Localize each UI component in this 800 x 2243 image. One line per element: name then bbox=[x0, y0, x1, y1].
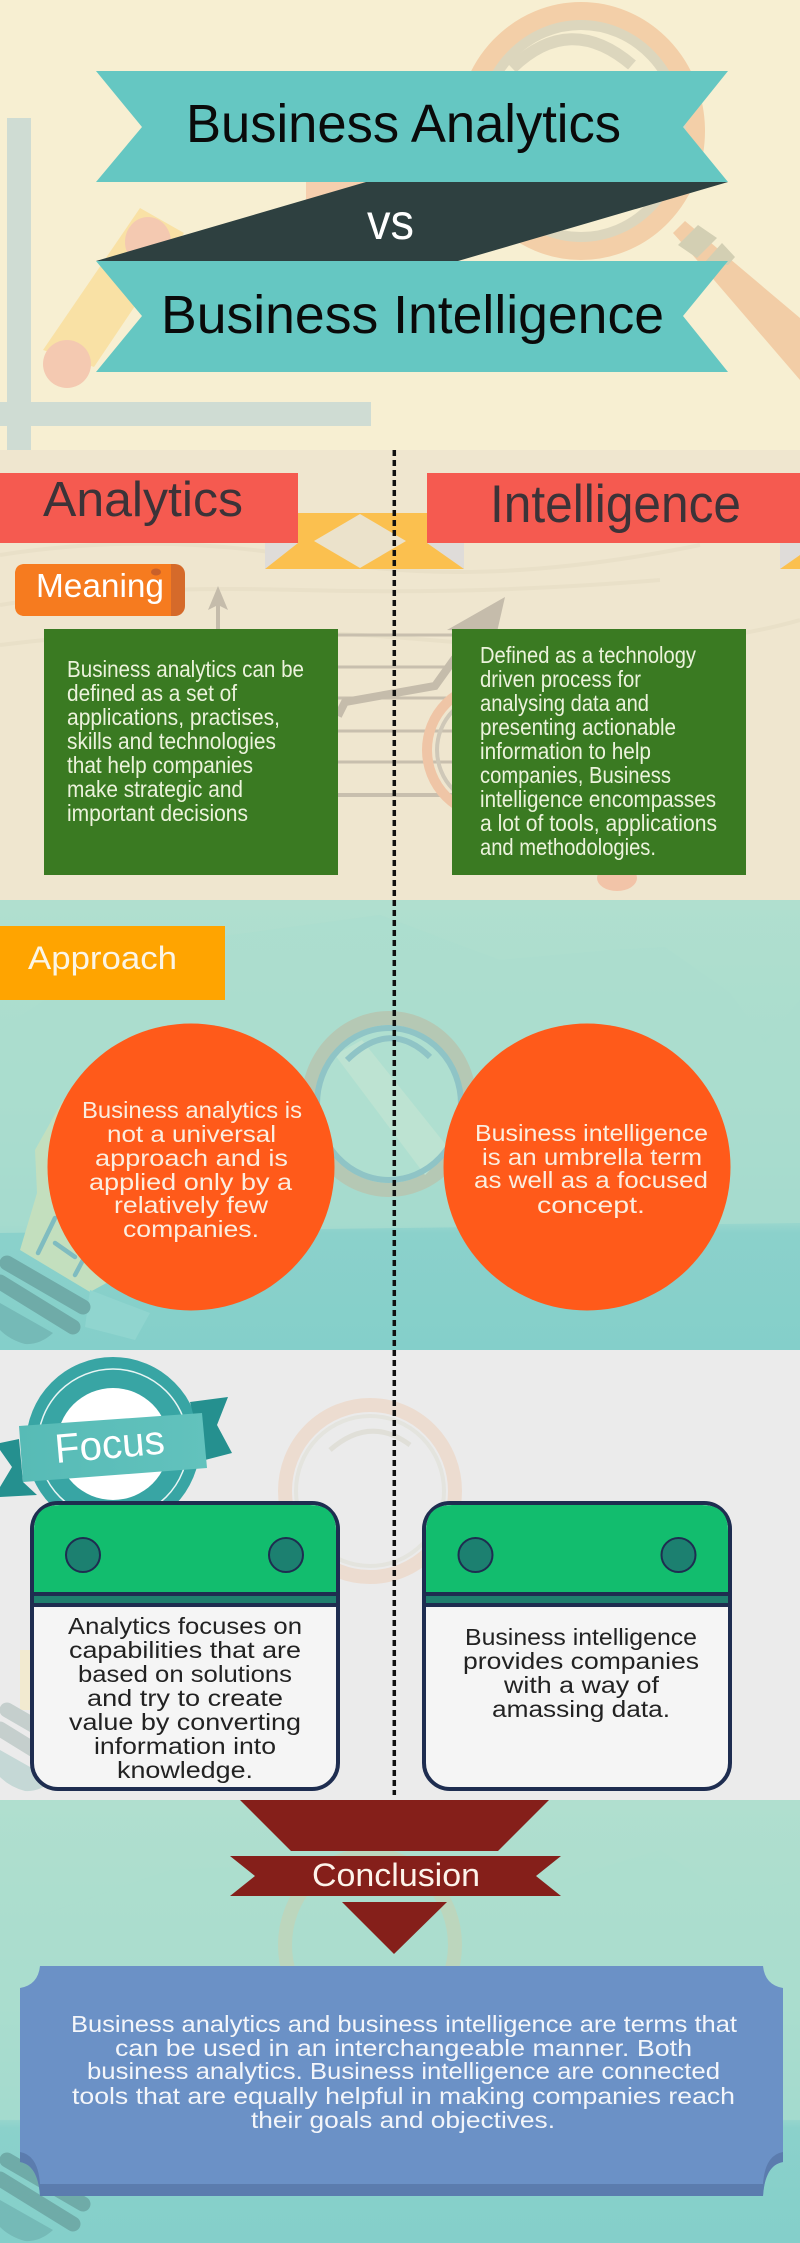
circle: analytics approach: approach and is bbox=[95, 1145, 288, 1171]
banner: Business Intelligence: Business Intelligence bbox=[161, 285, 664, 345]
badge: Focus: Focus bbox=[53, 1417, 166, 1472]
panel: focus bbox=[0, 1350, 800, 1800]
card: analytics focus bbox=[32, 1503, 338, 1789]
text box: analytics meaning: defined as a set of bbox=[67, 680, 237, 706]
text box: intelligence meaning: driven process for bbox=[480, 666, 641, 692]
background: magnifier bbox=[285, 1855, 455, 2035]
plaque: conclusion text: business analytics. Business intelligence are connected bbox=[87, 2058, 720, 2084]
text box: analytics meaning: make strategic and bbox=[67, 776, 243, 802]
text box: analytics meaning: important decisions bbox=[67, 800, 248, 826]
text box: analytics meaning: skills and technologies bbox=[67, 728, 276, 754]
tag: Approach: Approach bbox=[28, 940, 177, 976]
heading: Analytics bbox=[0, 473, 298, 543]
panel: approach bbox=[0, 900, 800, 1350]
badge: Focus bbox=[0, 1357, 232, 1531]
background: light bulb bbox=[0, 1100, 150, 1344]
circle: analytics approach: applied only by a bbox=[89, 1169, 293, 1195]
circle: analytics approach bbox=[48, 1024, 334, 1310]
background: pencil bbox=[43, 182, 366, 388]
card: intelligence focus: with a way of bbox=[503, 1672, 660, 1698]
text box: intelligence meaning: intelligence encompasses bbox=[480, 786, 716, 812]
plaque: conclusion text bbox=[20, 1966, 783, 2196]
banner: vs: vs bbox=[367, 194, 414, 250]
tag: Approach bbox=[0, 926, 225, 1000]
plaque: conclusion text: Business analytics and business intelligence are terms that bbox=[71, 2011, 738, 2037]
heading: Analytics: Analytics bbox=[43, 473, 243, 527]
banner: Business Analytics bbox=[96, 71, 728, 182]
shape: bottom triangle bbox=[342, 1902, 447, 1954]
text box: analytics meaning: Business analytics can be bbox=[67, 656, 304, 682]
card: analytics focus: Analytics focuses on bbox=[68, 1613, 302, 1639]
circle: intelligence approach: is an umbrella term bbox=[482, 1144, 702, 1170]
card: analytics focus: knowledge. bbox=[117, 1757, 253, 1783]
tag: Meaning: Meaning bbox=[36, 567, 164, 604]
text box: intelligence meaning: Defined as a technology bbox=[480, 642, 696, 668]
panel: header bbox=[0, 0, 800, 450]
background: light bulb bars bbox=[0, 2160, 83, 2241]
background: mountains bbox=[0, 1850, 800, 2120]
card: analytics focus: based on solutions bbox=[78, 1661, 292, 1687]
panel: conclusion bbox=[0, 1800, 800, 2243]
card: analytics focus: and try to create bbox=[87, 1685, 283, 1711]
shape: top trapezoid bbox=[240, 1800, 549, 1851]
tag: Meaning bbox=[15, 564, 185, 616]
circle: intelligence approach: Business intelligence bbox=[475, 1120, 708, 1146]
divider: dotted centre line bbox=[393, 450, 396, 1795]
heading: Intelligence: Intelligence bbox=[490, 475, 741, 534]
text box: intelligence meaning: companies, Business bbox=[480, 762, 671, 788]
background: magnifier bbox=[308, 1018, 470, 1190]
decoration: yellow triangles bbox=[265, 513, 800, 569]
background: light bulb bars bbox=[0, 1650, 83, 1791]
text box: analytics meaning bbox=[44, 629, 338, 875]
background: magnifier bbox=[467, 12, 800, 380]
text box: intelligence meaning bbox=[452, 629, 746, 875]
card: analytics focus: capabilities that are bbox=[69, 1637, 301, 1663]
text box: analytics meaning: that help companies bbox=[67, 752, 253, 778]
card: intelligence focus: Business intelligence bbox=[465, 1624, 697, 1650]
background: magnifier bbox=[285, 1405, 455, 1577]
heading: Intelligence bbox=[427, 473, 800, 543]
card: intelligence focus: provides companies bbox=[463, 1648, 699, 1674]
plaque: conclusion text: their goals and objectives. bbox=[251, 2107, 555, 2133]
background: ruler cross bbox=[0, 118, 371, 450]
circle: analytics approach: relatively few bbox=[114, 1192, 269, 1218]
plaque: conclusion text: tools that are equally helpful in making companies reach bbox=[72, 2083, 735, 2109]
circle: analytics approach: companies. bbox=[123, 1216, 259, 1242]
banner: vs bbox=[96, 182, 728, 261]
text box: intelligence meaning: presenting actionable bbox=[480, 714, 676, 740]
background: chart bbox=[208, 586, 637, 891]
card: analytics focus: value by converting bbox=[69, 1709, 301, 1735]
plaque: conclusion text: can be used in an interchangeable manner. Both bbox=[115, 2035, 692, 2061]
banner: Business Analytics: Business Analytics bbox=[186, 94, 621, 154]
text box: intelligence meaning: a lot of tools, applications bbox=[480, 810, 717, 836]
text box: analytics meaning: applications, practises, bbox=[67, 704, 280, 730]
ribbon: Conclusion bbox=[230, 1856, 561, 1896]
background: mountains bbox=[0, 915, 800, 1233]
background: wood grain bbox=[0, 544, 800, 647]
text box: intelligence meaning: information to help bbox=[480, 738, 651, 764]
text box: intelligence meaning: and methodologies. bbox=[480, 834, 656, 860]
card: intelligence focus: amassing data. bbox=[492, 1696, 670, 1722]
card: analytics focus: information into bbox=[94, 1733, 276, 1759]
circle: intelligence approach: as well as a focused bbox=[474, 1167, 708, 1193]
text box: intelligence meaning: analysing data and bbox=[480, 690, 649, 716]
circle: analytics approach: not a universal bbox=[107, 1121, 276, 1147]
circle: intelligence approach bbox=[444, 1024, 730, 1310]
circle: intelligence approach: concept. bbox=[537, 1192, 645, 1218]
banner: Business Intelligence bbox=[96, 261, 728, 372]
circle: analytics approach: Business analytics is bbox=[82, 1097, 302, 1123]
panel: meaning bbox=[0, 450, 800, 900]
card: intelligence focus bbox=[424, 1503, 730, 1789]
ribbon: Conclusion: Conclusion bbox=[312, 1857, 480, 1893]
